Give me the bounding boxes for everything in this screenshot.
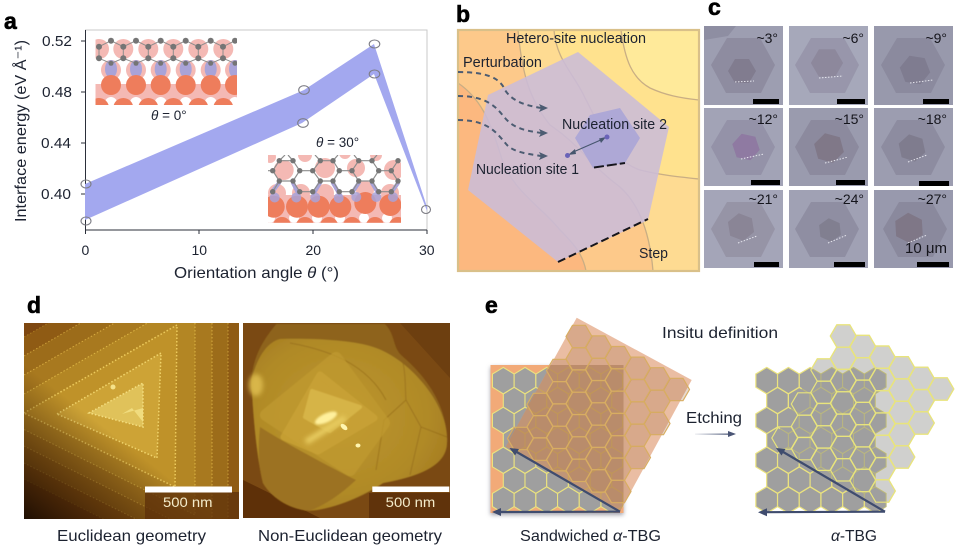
image ~12 degrees	[704, 108, 783, 186]
panel c: microscope image grid	[704, 26, 953, 268]
x tick labels: 30	[419, 242, 435, 258]
panel e right: alpha-TBG	[756, 325, 954, 516]
perturbation dashed arrows	[458, 72, 548, 160]
bottom substrate	[490, 365, 624, 513]
chart frame and axes	[81, 30, 427, 234]
inset caption theta 0: θ = 0°	[151, 108, 187, 123]
panel b text: Step	[639, 246, 668, 262]
image ~27 degrees: 10 μm	[905, 240, 947, 257]
small second-layer hexagon	[575, 108, 640, 168]
caption alpha-TBG: α-TBG	[831, 528, 877, 545]
y tick labels: 0.40	[41, 187, 71, 203]
caption sandwiched: Sandwiched α-TBG	[520, 528, 661, 545]
large graphene hexagon	[468, 52, 669, 262]
image ~18 degrees	[874, 108, 953, 186]
inset: theta 0 atomic structure	[96, 38, 237, 105]
inset caption theta 30: θ = 30°	[316, 135, 359, 150]
step edges dashed	[558, 163, 648, 262]
image ~3 degrees: ~3°	[756, 30, 778, 46]
image ~12 degrees: ~12°	[749, 111, 778, 127]
x tick labels: 20	[306, 242, 321, 258]
panel d label: d	[27, 292, 41, 318]
panel a: interface energy chart	[11, 30, 435, 282]
image ~27 degrees: ~27°	[918, 191, 947, 207]
panel b label: b	[456, 1, 470, 27]
panel b text	[463, 31, 668, 262]
image ~6 degrees: ~6°	[842, 30, 864, 46]
scale bar	[372, 486, 449, 492]
y tick labels: 0.48	[42, 85, 72, 101]
y tick labels: 0.52	[42, 34, 72, 50]
light rotated lattice	[772, 325, 954, 502]
panel frame	[458, 30, 699, 271]
panel b: hetero-site nucleation diagram	[458, 30, 699, 271]
image ~9 degrees	[874, 26, 953, 105]
image ~18 degrees: ~18°	[918, 111, 947, 127]
rotated lattice	[508, 325, 690, 503]
panel b text: Perturbation	[463, 55, 542, 71]
panel d left: Euclidean AFM image	[24, 323, 239, 519]
overlap rotated outlines	[772, 325, 954, 502]
x tick labels: 10	[192, 242, 207, 258]
y tick labels	[41, 34, 72, 203]
image ~27 degrees	[874, 190, 953, 268]
image ~24 degrees	[789, 190, 868, 268]
panel e label: e	[485, 292, 498, 318]
panel a label: a	[4, 8, 17, 34]
panel e left: sandwiched stack	[490, 318, 692, 516]
panel b text: Nucleation site 2	[562, 117, 667, 133]
scale text: 500 nm	[386, 494, 435, 510]
dimmed base lattice in overlap	[779, 367, 887, 509]
energy band	[85, 44, 427, 220]
x axis title: Orientation angle θ (°)	[174, 265, 339, 282]
etching label: Etching	[686, 410, 742, 427]
nucleation sites with double arrow	[565, 134, 610, 158]
image ~24 degrees: ~24°	[835, 191, 864, 207]
x tick labels: 0	[82, 242, 90, 258]
image ~9 degrees: ~9°	[925, 30, 947, 46]
image ~15 degrees	[789, 108, 868, 186]
twist angle arrows	[758, 448, 885, 516]
image ~6 degrees	[789, 26, 868, 105]
inset: theta 30 atomic structure	[268, 155, 401, 223]
base lattice seen through flake	[516, 367, 624, 510]
image ~21 degrees: ~21°	[749, 191, 778, 207]
base graphene lattice	[492, 367, 623, 513]
twist angle arrows	[492, 448, 620, 516]
caption Non-Euclidean geometry: Non-Euclidean geometry	[258, 528, 442, 545]
panel b text: Nucleation site 1	[476, 162, 579, 178]
etching arrow	[695, 431, 736, 437]
overlap darkening	[506, 365, 624, 512]
scale text: 500 nm	[163, 494, 212, 510]
scale bar	[145, 486, 232, 492]
data point markers	[81, 40, 430, 225]
image ~15 degrees: ~15°	[835, 111, 864, 127]
image ~21 degrees	[704, 190, 783, 268]
dark base lattice	[756, 367, 886, 513]
panel d right: non-Euclidean AFM image	[243, 323, 450, 518]
caption Euclidean geometry: Euclidean geometry	[57, 528, 206, 545]
rotated top flake	[506, 318, 692, 512]
heading Insitu definition: Insitu definition	[662, 325, 778, 342]
x tick labels	[82, 242, 435, 258]
y axis title: Interface energy (eV Å⁻¹)	[11, 40, 30, 222]
y tick labels: 0.44	[41, 136, 71, 152]
panel b text: Hetero-site nucleation	[506, 31, 646, 47]
image ~3 degrees	[704, 26, 783, 105]
substrate terraces	[458, 30, 699, 271]
